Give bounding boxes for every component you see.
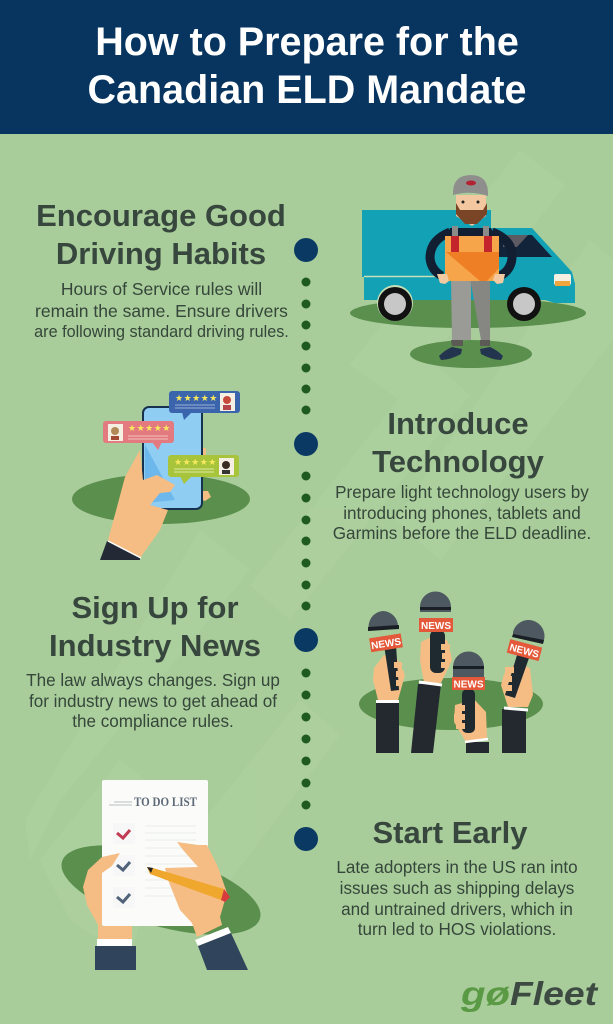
section 1 text: Encourage Good Driving Habits: Encourage Good xyxy=(36,198,286,233)
icon: green review bubble xyxy=(168,455,239,484)
illustration: delivery van and driver xyxy=(350,175,586,368)
title xyxy=(88,20,526,112)
icon: microphone 2: NEWS xyxy=(421,621,451,632)
section 2 text: Introduce Technology xyxy=(333,406,591,543)
timeline xyxy=(294,238,318,851)
icon: microphone 2 xyxy=(411,592,453,753)
section 2 text: Introduce Technology: introducing phones, tablets and xyxy=(343,504,581,523)
section 3 text: Sign Up for Industry News xyxy=(26,590,280,731)
title: Canadian ELD Mandate xyxy=(88,68,526,112)
icon: paper: TO DO LIST xyxy=(134,794,197,809)
section 4 text: Start Early: Start Early xyxy=(372,815,528,850)
icon: pink review bubble xyxy=(103,421,174,450)
section 2 text: Introduce Technology: Prepare light technology users by xyxy=(335,483,589,502)
icon: microphone 1 xyxy=(368,611,405,753)
section 1 text: Encourage Good Driving Habits: are following standard driving rules. xyxy=(34,323,289,341)
icon: blue review bubble xyxy=(169,391,240,420)
section 2 text: Introduce Technology: Introduce xyxy=(387,406,529,441)
section 4 text: Start Early: Late adopters in the US ran into xyxy=(336,858,578,877)
section 1 text: Encourage Good Driving Habits: Driving Habits xyxy=(56,236,266,271)
section 4 text: Start Early: issues such as shipping delays xyxy=(340,879,574,898)
icon: microphone 4: NEWS xyxy=(508,642,540,661)
icon: left hand xyxy=(83,853,136,970)
title: How to Prepare for the xyxy=(95,20,519,64)
icon: phone xyxy=(143,407,211,509)
icon: microphone 4 xyxy=(501,620,545,753)
icon: microphone 3: NEWS xyxy=(454,680,484,690)
section 3 text: Sign Up for Industry News: the compliance rules. xyxy=(72,712,234,731)
section 1 text: Encourage Good Driving Habits: Hours of Service rules will xyxy=(61,279,262,299)
illustration: phone with reviews xyxy=(72,391,250,560)
section 1 text: Encourage Good Driving Habits xyxy=(34,198,289,341)
icon: pink review bubble: ★★★★★ xyxy=(128,423,171,433)
section 2 text: Introduce Technology: Technology xyxy=(372,444,545,479)
icon: microphone 1: NEWS xyxy=(371,636,402,652)
icon: pencil xyxy=(147,867,230,902)
section 3 text: Sign Up for Industry News: Sign Up for xyxy=(71,590,239,625)
section 1 text: Encourage Good Driving Habits: remain the same. Ensure drivers xyxy=(35,301,288,321)
icon: van xyxy=(362,210,575,321)
section 4 text: Start Early xyxy=(336,815,578,939)
logo: goFleet: Fleet xyxy=(510,975,599,1012)
icon: hand xyxy=(100,450,175,560)
section 3 text: Sign Up for Industry News: for industry news to get ahead of xyxy=(29,692,277,711)
section 3 text: Sign Up for Industry News: The law always changes. Sign up xyxy=(26,671,280,690)
section 4 text: Start Early: turn led to HOS violations. xyxy=(358,920,556,939)
icon: right hand xyxy=(165,842,248,970)
icon: paper xyxy=(102,780,208,926)
header banner xyxy=(0,0,613,134)
icon: green review bubble: ★★★★★ xyxy=(174,457,217,467)
illustration: to do list xyxy=(52,780,270,970)
icon: microphone 3 xyxy=(452,652,489,753)
section 4 text: Start Early: and untrained drivers, which in xyxy=(341,900,573,919)
icon: blue review bubble: ★★★★★ xyxy=(175,393,218,403)
icon: driver xyxy=(430,175,512,360)
section 2 text: Introduce Technology: Garmins before the ELD deadline. xyxy=(333,524,591,543)
illustration: news microphones xyxy=(359,592,545,753)
logo: goFleet: gø xyxy=(460,975,510,1012)
logo: goFleet xyxy=(460,975,599,1012)
section 3 text: Sign Up for Industry News: Industry News xyxy=(49,628,261,663)
